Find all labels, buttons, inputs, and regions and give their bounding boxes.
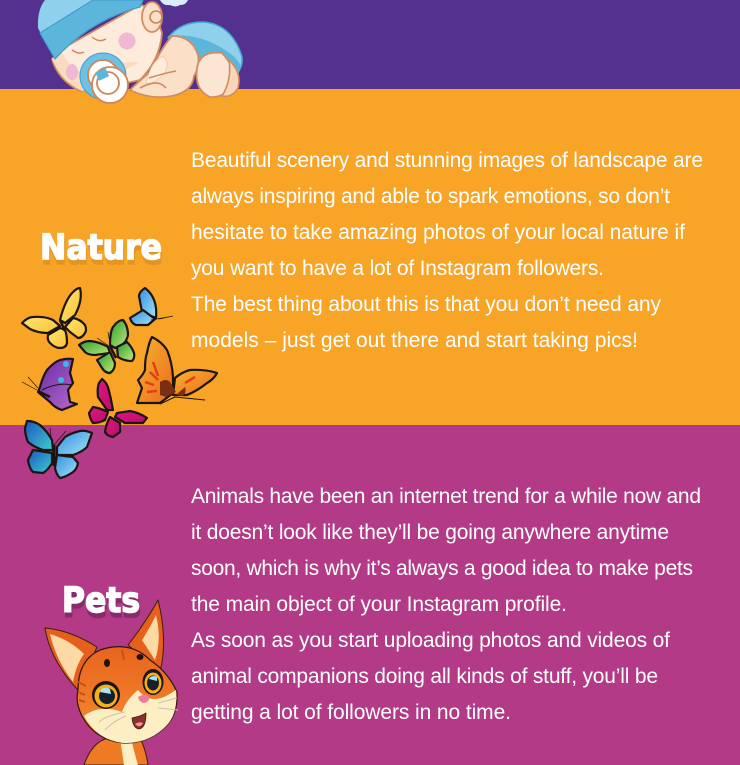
text block: pets description bbox=[191, 485, 701, 724]
text block: nature description: hesitate to take amazing photos of your local nature if bbox=[191, 221, 685, 244]
heading: Nature: Nature bbox=[40, 228, 162, 268]
text block: nature description: models – just get out there and start taking pics! bbox=[191, 329, 638, 352]
icon: purple butterfly bbox=[22, 359, 77, 410]
icon: large blue butterfly bbox=[25, 421, 92, 478]
text block: pets description: the main object of your Instagram profile. bbox=[191, 593, 567, 616]
text block: nature description: you want to have a lot of Instagram followers. bbox=[191, 257, 604, 280]
text block: pets description: Animals have been an internet trend for a while now and bbox=[191, 485, 701, 508]
icon: orange butterfly bbox=[137, 337, 217, 404]
panel: nature bbox=[0, 89, 740, 425]
illustration: butterflies bbox=[22, 288, 217, 478]
text block: pets description: As soon as you start uploading photos and videos of bbox=[191, 629, 670, 652]
text block: pets description: animal companions doing all kinds of stuff, you’ll be bbox=[191, 665, 658, 688]
heading: Pets: Pets bbox=[62, 581, 140, 621]
illustration: cat bbox=[45, 600, 178, 765]
panel: purple header band bbox=[0, 0, 740, 89]
text block: pets description: getting a lot of followers in no time. bbox=[191, 701, 511, 724]
panel: pets bbox=[0, 425, 740, 765]
heading: Nature: Nature bbox=[41, 233, 163, 273]
text block: nature description: always inspiring and able to spark emotions, so don’t bbox=[191, 185, 670, 208]
text block: nature description: The best thing about this is that you don’t need any bbox=[191, 293, 662, 316]
icon: yellow butterfly bbox=[22, 288, 86, 348]
text block: nature description: Beautiful scenery and stunning images of landscape are bbox=[191, 149, 703, 172]
heading: Pets: Pets bbox=[63, 586, 141, 626]
text block: pets description: it doesn’t look like they’ll be going anywhere anytime bbox=[191, 521, 669, 544]
icon: magenta butterfly bbox=[89, 379, 147, 437]
icon: green butterfly bbox=[79, 320, 134, 373]
text block: nature description bbox=[191, 149, 703, 352]
text block: pets description: soon, which is why it’s always a good idea to make pets bbox=[191, 557, 693, 580]
icon: small blue butterfly bbox=[130, 288, 173, 325]
illustration: sleeping baby bbox=[38, 0, 242, 103]
